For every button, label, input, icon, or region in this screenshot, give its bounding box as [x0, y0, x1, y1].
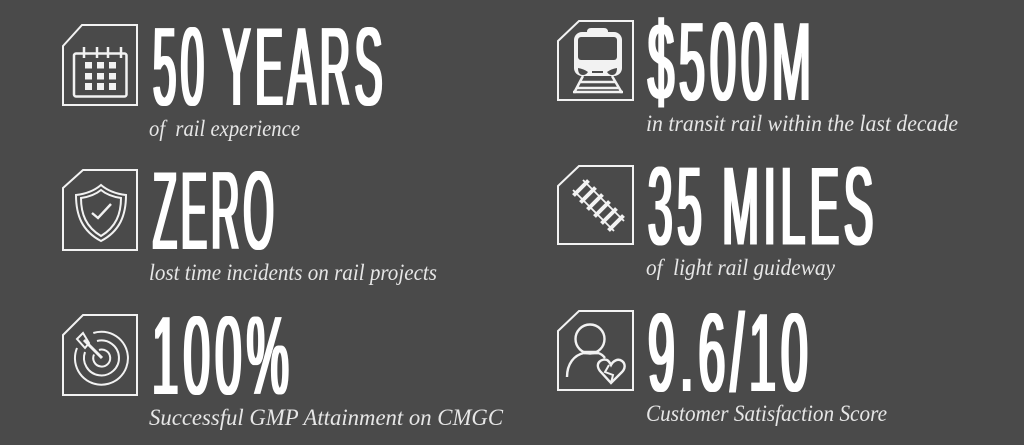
text: 50 YEARS	[153, 5, 387, 129]
stat: 100 percent: 100%	[152, 294, 294, 418]
caption: light rail guideway: of light rail guideway	[646, 255, 836, 280]
caption: rail experience: of rail experience	[149, 116, 300, 141]
caption: lost time incidents: lost time incidents on rail projects	[149, 260, 437, 285]
icon: track	[558, 166, 633, 244]
stat: 35 miles	[558, 144, 878, 280]
caption: customer satisfaction: Customer Satisfaction Score	[646, 401, 887, 426]
caption: GMP attainment: Successful GMP Attainment on CMGC	[149, 405, 504, 430]
icon: calendar	[63, 25, 137, 105]
stat: 50 years	[63, 5, 387, 141]
stat: 100 percent	[63, 294, 504, 430]
icon: train	[558, 21, 633, 100]
stat: 500M	[558, 0, 958, 136]
icon: shield	[63, 170, 137, 250]
stat: zero	[63, 149, 437, 285]
caption: transit rail: in transit rail within the last decade	[646, 111, 958, 136]
icon: person with heart	[558, 311, 633, 390]
stat: customer satisfaction	[558, 291, 887, 426]
icon: target	[63, 315, 137, 395]
stat: customer satisfaction: 9.6/10	[648, 291, 813, 415]
stat: zero: ZERO	[153, 149, 278, 273]
